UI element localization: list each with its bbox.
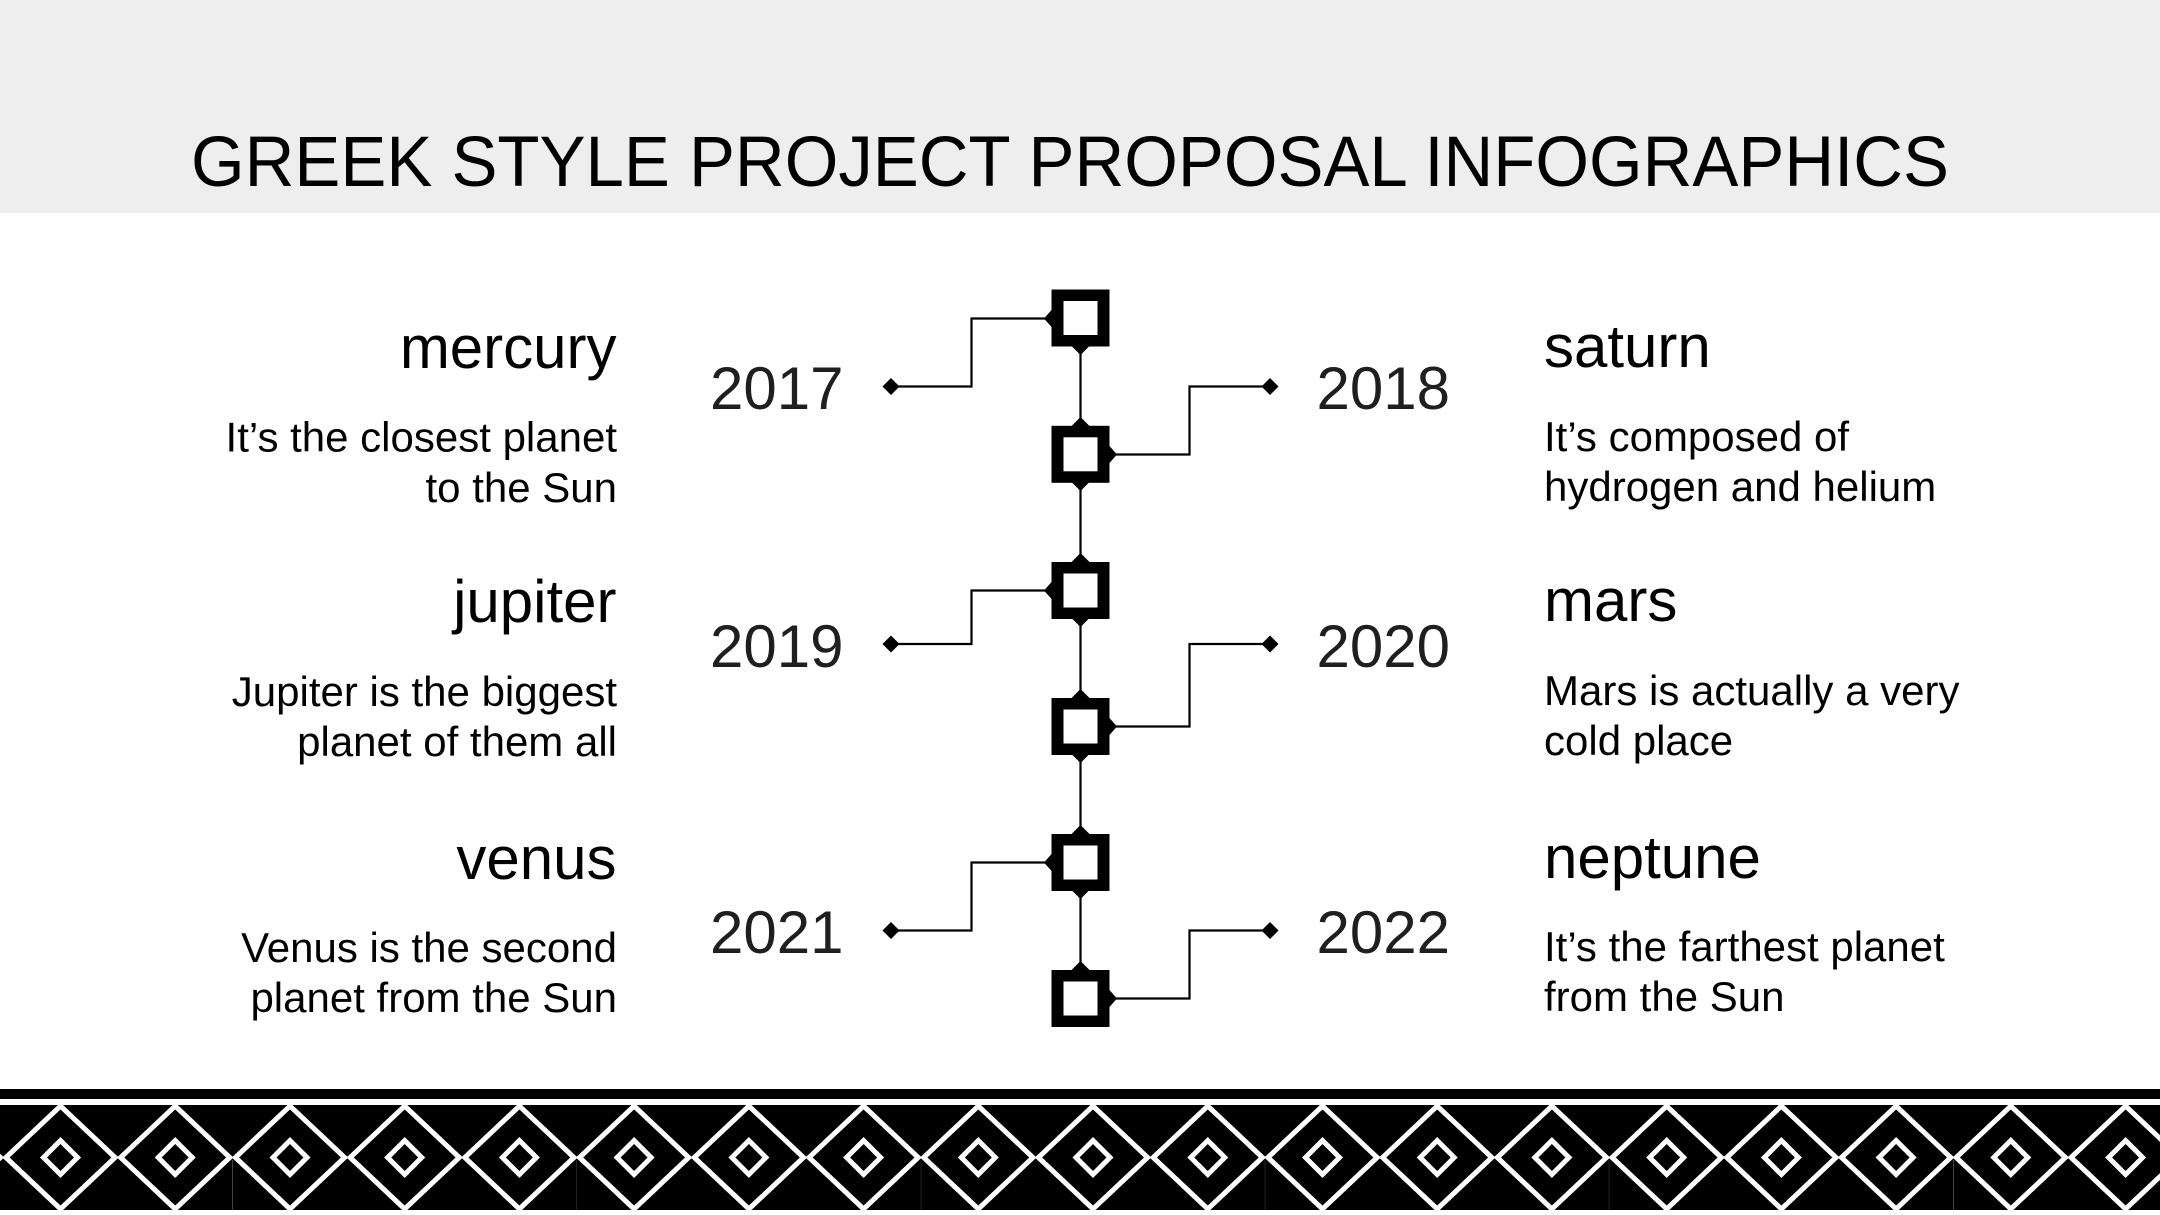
central vertical line (1079, 318, 1082, 998)
panel: jupiter (232, 568, 617, 765)
panel: mercury: mercury (400, 314, 616, 381)
panel: mercury: It’s the closest planet (226, 414, 617, 460)
panel: neptune: neptune (1544, 824, 1761, 891)
node 2018 (1052, 426, 1110, 483)
panel: venus: Venus is the second (241, 924, 617, 971)
year labels: 2022 (1316, 899, 1450, 966)
panel: neptune: It’s the farthest planet (1544, 923, 1945, 970)
panel: mercury (226, 314, 617, 511)
panel: mars: cold place (1544, 717, 1733, 764)
panel: saturn: hydrogen and helium (1544, 463, 1936, 510)
year labels: 2017 (710, 355, 843, 422)
node diamonds (1044, 310, 1117, 1008)
panel: jupiter: jupiter (451, 568, 616, 635)
panel: jupiter: Jupiter is the biggest (232, 668, 617, 715)
year labels: 2021 (710, 899, 843, 966)
year labels: 2018 (1316, 355, 1450, 422)
year labels: 2020 (1316, 613, 1450, 680)
node 2017 (1052, 290, 1110, 346)
panel: saturn: It’s composed of (1544, 413, 1849, 460)
panel: mars: Mars is actually a very (1544, 667, 1959, 714)
node 2020 (1052, 698, 1110, 755)
footer bar (0, 1089, 2160, 1099)
panel: saturn: saturn (1544, 313, 1711, 380)
panel: neptune (1544, 824, 1945, 1020)
node 2022 (1052, 970, 1110, 1027)
title: GREEK STYLE PROJECT PROPOSAL INFOGRAPHICS (191, 123, 1949, 202)
node 2021 (1052, 834, 1110, 891)
panel: neptune: from the Sun (1544, 973, 1784, 1020)
panel: venus: venus (456, 825, 616, 892)
year labels (710, 355, 1450, 966)
panel: venus (241, 825, 617, 1021)
end diamonds (882, 378, 1278, 939)
panel: mars (1544, 567, 1959, 764)
connectors (891, 318, 1270, 998)
panel: jupiter: planet of them all (297, 718, 617, 765)
panel: saturn (1544, 313, 1936, 510)
panel: venus: planet from the Sun (250, 974, 617, 1021)
panel: mars: mars (1544, 567, 1677, 634)
timeline (882, 290, 1278, 1027)
year labels: 2019 (710, 613, 843, 680)
footer pattern band (0, 1105, 2160, 1210)
header band (0, 0, 2160, 213)
node 2019 (1052, 562, 1110, 619)
panel: mercury: to the Sun (426, 464, 617, 511)
